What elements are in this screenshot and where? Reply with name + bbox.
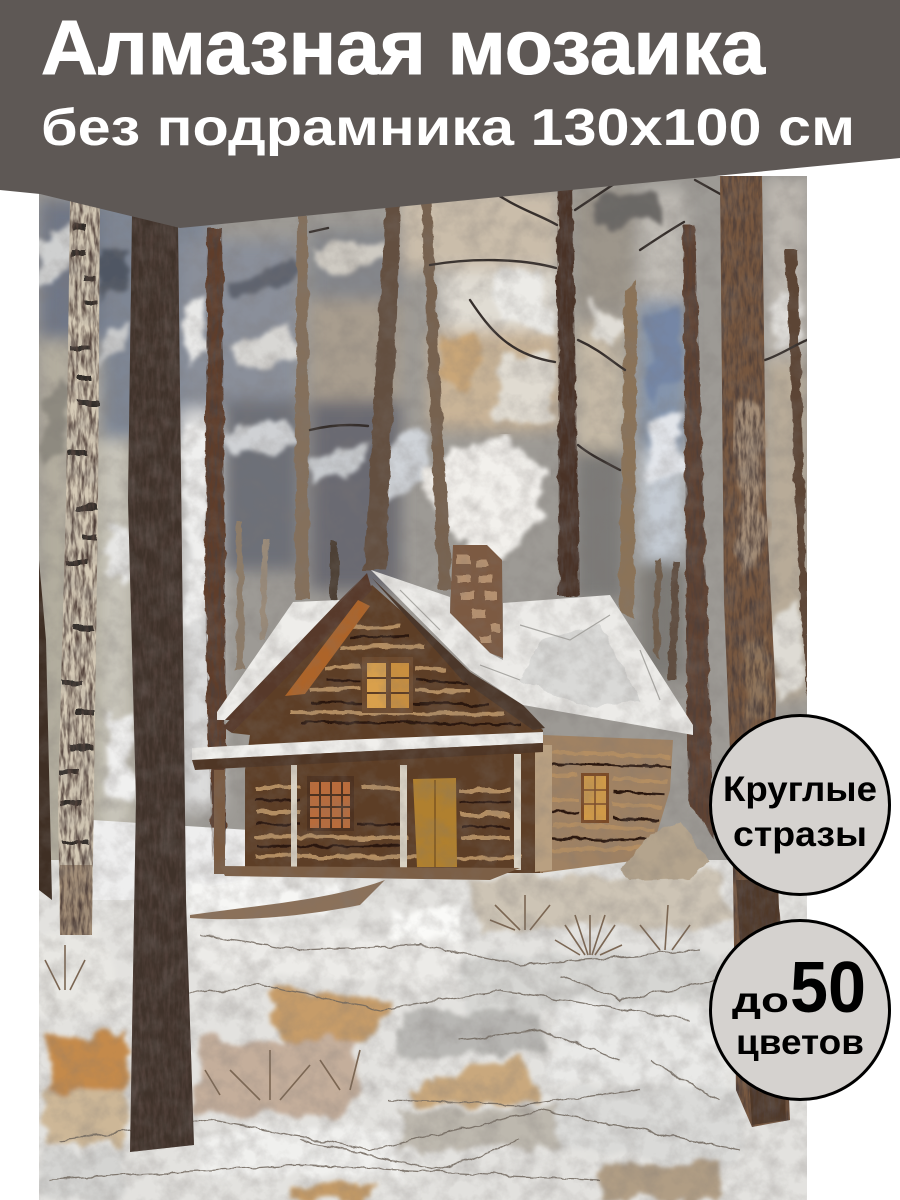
birch tree [58, 200, 100, 935]
door [413, 778, 457, 867]
far left dark tree [39, 560, 52, 900]
smoke [425, 440, 545, 555]
dry bushes [45, 895, 690, 1100]
porch window [307, 776, 354, 831]
paper texture [39, 176, 807, 1200]
wall logs [255, 626, 670, 858]
badge text line 1: Круглые [723, 770, 877, 809]
big dark left tree [128, 215, 194, 1152]
header banner [0, 0, 900, 228]
badge number 50: 50 [790, 948, 866, 1028]
snowy ground [39, 820, 807, 1200]
porch floor [220, 866, 520, 880]
dry grass beside cabin [620, 822, 708, 880]
porch snow roof [192, 732, 543, 760]
panel: winter cabin artwork [39, 176, 807, 1200]
thin background trees [205, 185, 807, 860]
title: Алмазная мозаика [41, 5, 766, 91]
badge text "до": до [732, 981, 789, 1020]
side window [581, 773, 609, 823]
beam under roof [372, 578, 545, 730]
log cabin [192, 545, 693, 880]
dark foreground trunks and birch [39, 176, 807, 1200]
badge text "цветов": цветов [736, 1023, 864, 1062]
gable trim [223, 573, 372, 733]
badge: up to 50 colours [710, 920, 890, 1100]
cabin front wall [232, 585, 543, 873]
big right brown tree [720, 176, 790, 1127]
chimney [450, 545, 503, 658]
bare branches [310, 180, 807, 470]
upper window [362, 657, 413, 713]
cabin side wall [540, 735, 673, 873]
porch posts [291, 754, 521, 870]
subtitle: без подрамника 130х100 см [41, 99, 855, 157]
sky paper streaks [40, 190, 805, 810]
stone corner [535, 745, 552, 872]
badge text line 2: стразы [733, 815, 867, 854]
orange gable board [285, 600, 370, 696]
snow roof right [371, 570, 693, 735]
badge: round rhinestones [710, 716, 890, 894]
snow roof left [217, 600, 340, 720]
forest sky background [39, 176, 807, 876]
